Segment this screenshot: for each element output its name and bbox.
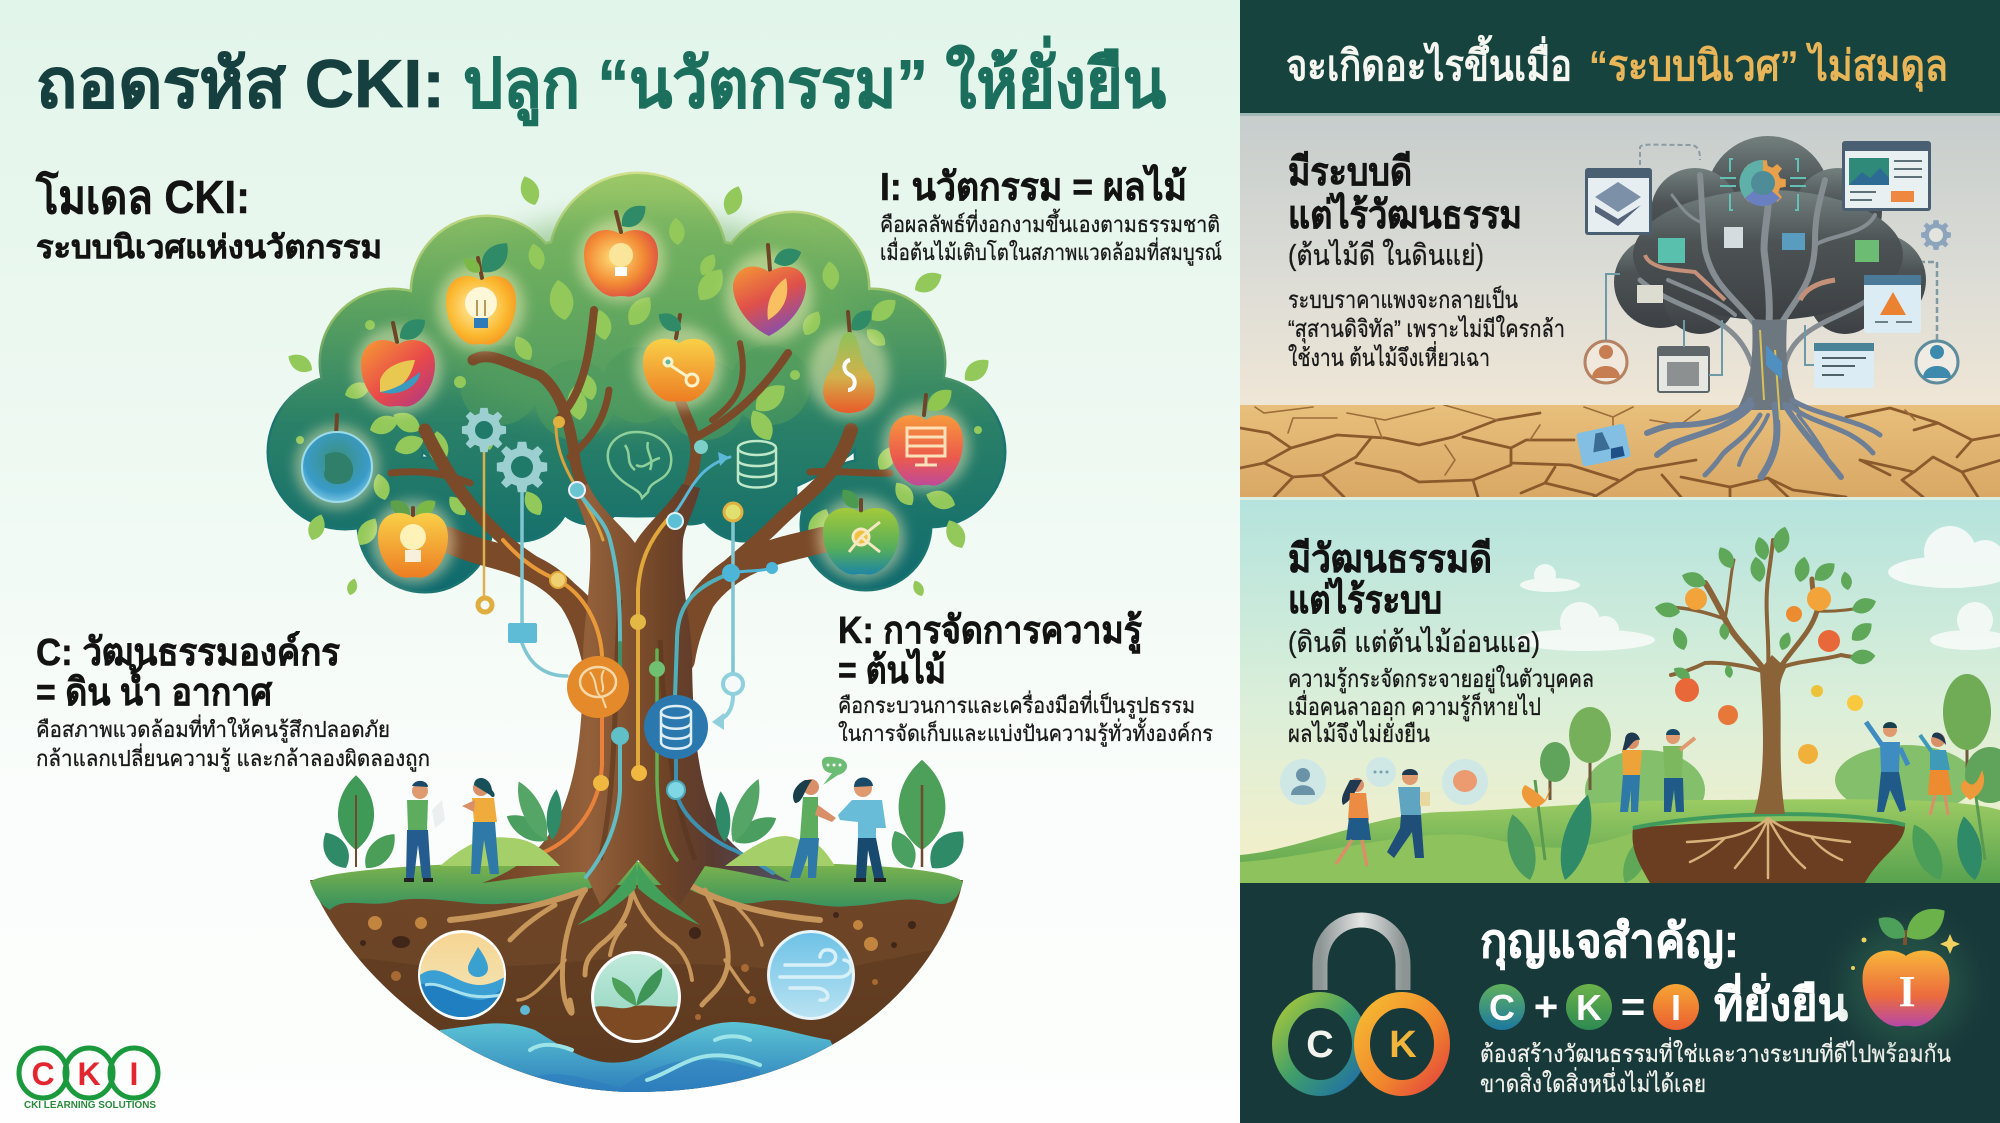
text block: I innovation: I: นวัตกรรม = ผลไม้ (880, 164, 1187, 209)
panel 1 body: ระบบราคาแพงจะกลายเป็น (1288, 285, 1518, 314)
walking people with speech bubbles (1280, 757, 1488, 866)
panel 2 heading (1288, 538, 1540, 659)
title: ปลูก “นวัตกรรม” ให้ยั่งยืน (463, 35, 1166, 127)
icon: C K padlock: K (1389, 1024, 1417, 1066)
young tree leaves (1654, 525, 1878, 683)
icon: apple I (1844, 900, 1968, 1045)
icon: C K padlock: C (1306, 1024, 1334, 1066)
soil pit (1632, 821, 1905, 883)
text block: K knowledge: คือกระบวนการและเครื่องมือที่เป็นรูปธรรม (838, 690, 1195, 719)
orange fruits (1675, 587, 1863, 764)
logo: CKI learning solutions: I (130, 1056, 138, 1092)
text block: K knowledge (838, 610, 1213, 747)
text block: C culture (36, 631, 430, 772)
right header: จะเกิดอะไรขึ้นเมื่อ (1286, 34, 1572, 89)
circuit nodes (478, 416, 778, 799)
icon: water (418, 930, 506, 1020)
people by tree (1620, 722, 1952, 815)
fruits (295, 200, 970, 584)
trunk circuit lines (484, 424, 773, 877)
heading: CKI model: โมเดล CKI: (35, 170, 250, 223)
panel 1 body: “สุสานดิจิทัล” เพราะไม่มีใครกล้า (1288, 315, 1565, 344)
panel 2 heading: (ดินดี แต่ต้นไม้อ่อนแอ) (1288, 625, 1540, 659)
fruit icons (324, 243, 945, 562)
stems and fruit leaves (336, 212, 926, 520)
logo: CKI learning solutions: CKI LEARNING SOLUTIONS (24, 1100, 156, 1111)
canopy leaves (285, 173, 994, 598)
formula C + K = I (1479, 973, 1848, 1030)
trunk icon: database badge (644, 695, 708, 759)
clouds (1515, 526, 2000, 651)
text block: I innovation: คือผลลัพธ์ที่งอกงามขึ้นเองตามธรรมชาติ (880, 209, 1220, 237)
roots (1687, 818, 1850, 878)
tree illustration (269, 173, 1004, 1100)
panel 1 heading: มีระบบดี (1288, 151, 1412, 194)
young tree (1667, 540, 1870, 814)
icon: C K padlock (1280, 920, 1442, 1088)
text block: C culture: กล้าแลกเปลี่ยนความรู้ และกล้าลองผิดลองถูก (36, 743, 430, 772)
left panel background (0, 0, 1240, 1123)
background trees (1540, 674, 2000, 804)
panel 1 heading: (ต้นไม้ดี ในดินแย่) (1288, 238, 1484, 272)
text block: I innovation (880, 164, 1222, 266)
logo: CKI learning solutions (19, 1048, 158, 1111)
formula C + K = I: = (1621, 983, 1645, 1030)
right header (1240, 0, 2000, 113)
panel: good culture without system (1240, 497, 2000, 887)
trunk (482, 484, 790, 925)
soil pebbles (360, 912, 916, 1032)
formula C + K = I: C (1489, 987, 1515, 1028)
system icons (1585, 141, 1958, 392)
trunk icon: brain badge (567, 656, 629, 718)
hills (1240, 799, 2000, 883)
text block: I innovation: เมื่อต้นไม้เติบโตในสภาพแวดล้อมที่สมบูรณ์ (880, 237, 1222, 266)
formula C + K = I: ที่ยั่งยืน (1714, 973, 1848, 1030)
panel 2 heading: แต่ไร้ระบบ (1288, 577, 1442, 622)
panel 2 heading: มีวัฒนธรรมดี (1288, 538, 1492, 581)
text block: C culture: C: วัฒนธรรมองค์กร (36, 631, 341, 674)
foreground plants (1500, 770, 1987, 887)
grass band (310, 862, 963, 910)
dark system tree (1614, 136, 1926, 477)
icon: wind (767, 930, 855, 1020)
plants left and right (316, 760, 973, 877)
panel: good system without culture (1240, 113, 2000, 497)
panel 1 heading: แต่ไร้วัฒนธรรม (1288, 192, 1522, 237)
text block: C culture: = ดิน น้ำ อากาศ (36, 664, 273, 714)
key description: ต้องสร้างวัฒนธรรมที่ใช่และวางระบบที่ดีไปพร้อมกัน (1480, 1037, 1951, 1068)
text block: C culture: คือสภาพแวดล้อมที่ทำให้คนรู้สึกปลอดภัย (36, 714, 390, 743)
key description (1480, 1037, 1951, 1098)
panel 2 body: ผลไม้จึงไม่ยั่งยืน (1288, 717, 1430, 748)
icons in canopy: gears, brain, database (462, 408, 776, 498)
text block: K knowledge: K: การจัดการความรู้ (838, 610, 1143, 654)
panel 2 body: เมื่อคนลาออก ความรู้ก็หายไป (1288, 690, 1541, 722)
formula C + K = I: I (1671, 987, 1681, 1028)
formula C + K = I: K (1576, 987, 1602, 1028)
logo: CKI learning solutions: C (31, 1056, 55, 1092)
formula C + K = I: + (1534, 983, 1558, 1030)
roots (450, 885, 820, 1013)
heading: CKI model (35, 170, 382, 265)
key heading: กุญแจสำคัญ: (1480, 914, 1739, 970)
icon: seedling (590, 950, 682, 1045)
heading: CKI model: ระบบนิเวศแห่งนวัตกรรม (36, 229, 382, 265)
panel 2 body (1288, 665, 1594, 748)
panel 1 body (1288, 285, 1565, 372)
logo: CKI learning solutions: K (77, 1056, 101, 1092)
fallen card (1576, 423, 1631, 467)
text block: K knowledge: = ต้นไม้ (838, 648, 946, 692)
title (36, 35, 1166, 127)
key description: ขาดสิ่งใดสิ่งหนึ่งไม่ได้เลย (1480, 1067, 1706, 1098)
ground bowl (300, 862, 980, 1100)
title: ถอดรหัส CKI: (36, 46, 445, 122)
right header: “ระบบนิเวศ” ไม่สมดุล (1589, 41, 1948, 92)
icon: apple I: I (1898, 967, 1916, 1016)
tree canopy (269, 174, 1004, 591)
people right (790, 757, 886, 882)
panel 2 body: ความรู้กระจัดกระจายอยู่ในตัวบุคคล (1288, 665, 1594, 694)
people left (404, 778, 499, 882)
panel: key takeaway (1240, 883, 2000, 1123)
panel 1 body: ใช้งาน ต้นไม้จึงเหี่ยวเฉา (1288, 341, 1490, 372)
text block: K knowledge: ในการจัดเก็บและแบ่งปันความรู้ทั่วทั้งองค์กร (838, 718, 1213, 747)
branches (391, 310, 890, 660)
cracked soil (1240, 405, 2000, 497)
panel 1 heading (1288, 151, 1522, 272)
